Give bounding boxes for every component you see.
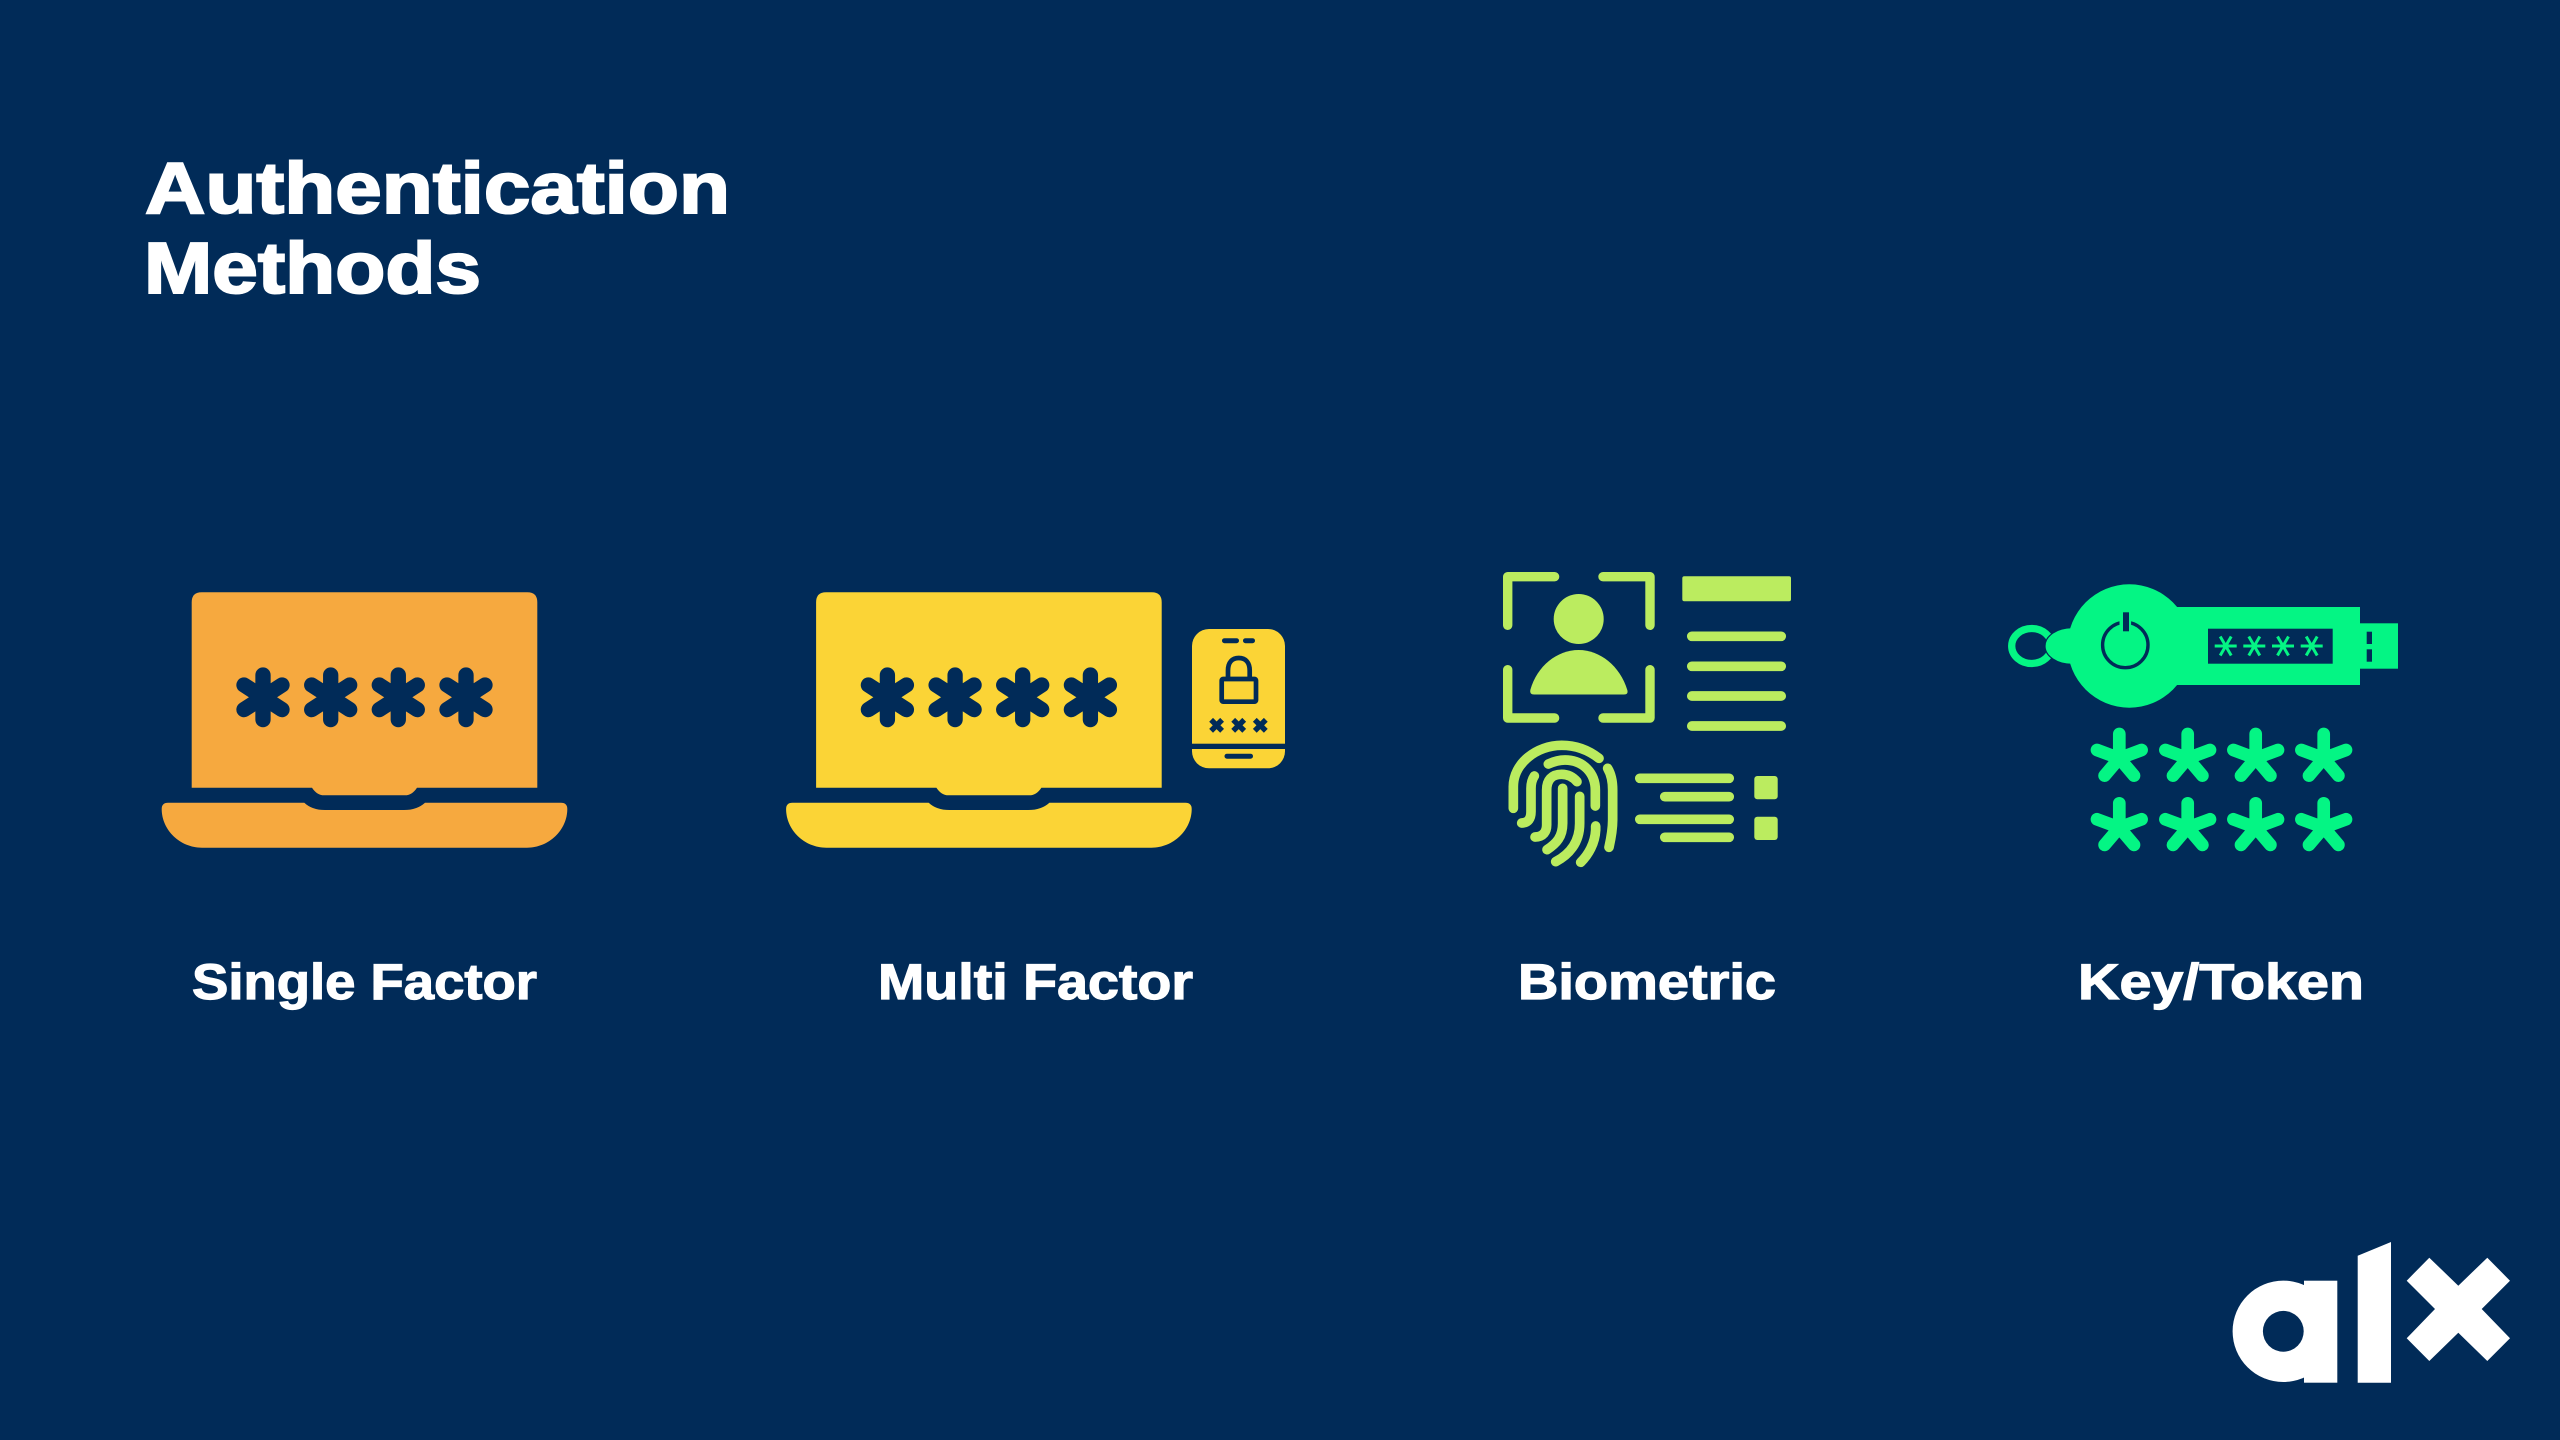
icon: laptop with password	[162, 592, 567, 848]
icon: data lines and checkboxes	[1640, 776, 1778, 840]
panel: multi factor	[786, 592, 1287, 1010]
label: biometric: Biometric	[1518, 954, 1776, 1010]
icon: phone with lock	[1190, 629, 1287, 768]
label: multi factor: Multi Factor	[878, 954, 1193, 1010]
icon: laptop with password	[786, 592, 1192, 848]
icon: usb security key	[2012, 584, 2398, 708]
icon: document lines	[1682, 576, 1791, 726]
title: Authentication	[145, 149, 730, 229]
icon: fingerprint	[1513, 745, 1613, 862]
panel: single factor	[162, 592, 567, 1010]
title: Methods	[144, 229, 481, 309]
panel: biometric	[1508, 576, 1791, 1010]
logo: alx	[2233, 1242, 2510, 1383]
label: single factor: Single Factor	[192, 954, 537, 1010]
panel: key token	[2012, 584, 2398, 1010]
title	[144, 149, 730, 309]
icon: asterisk rows	[2097, 734, 2346, 845]
label: key token: Key/Token	[2078, 954, 2364, 1010]
icon: face scan frame	[1508, 577, 1650, 718]
